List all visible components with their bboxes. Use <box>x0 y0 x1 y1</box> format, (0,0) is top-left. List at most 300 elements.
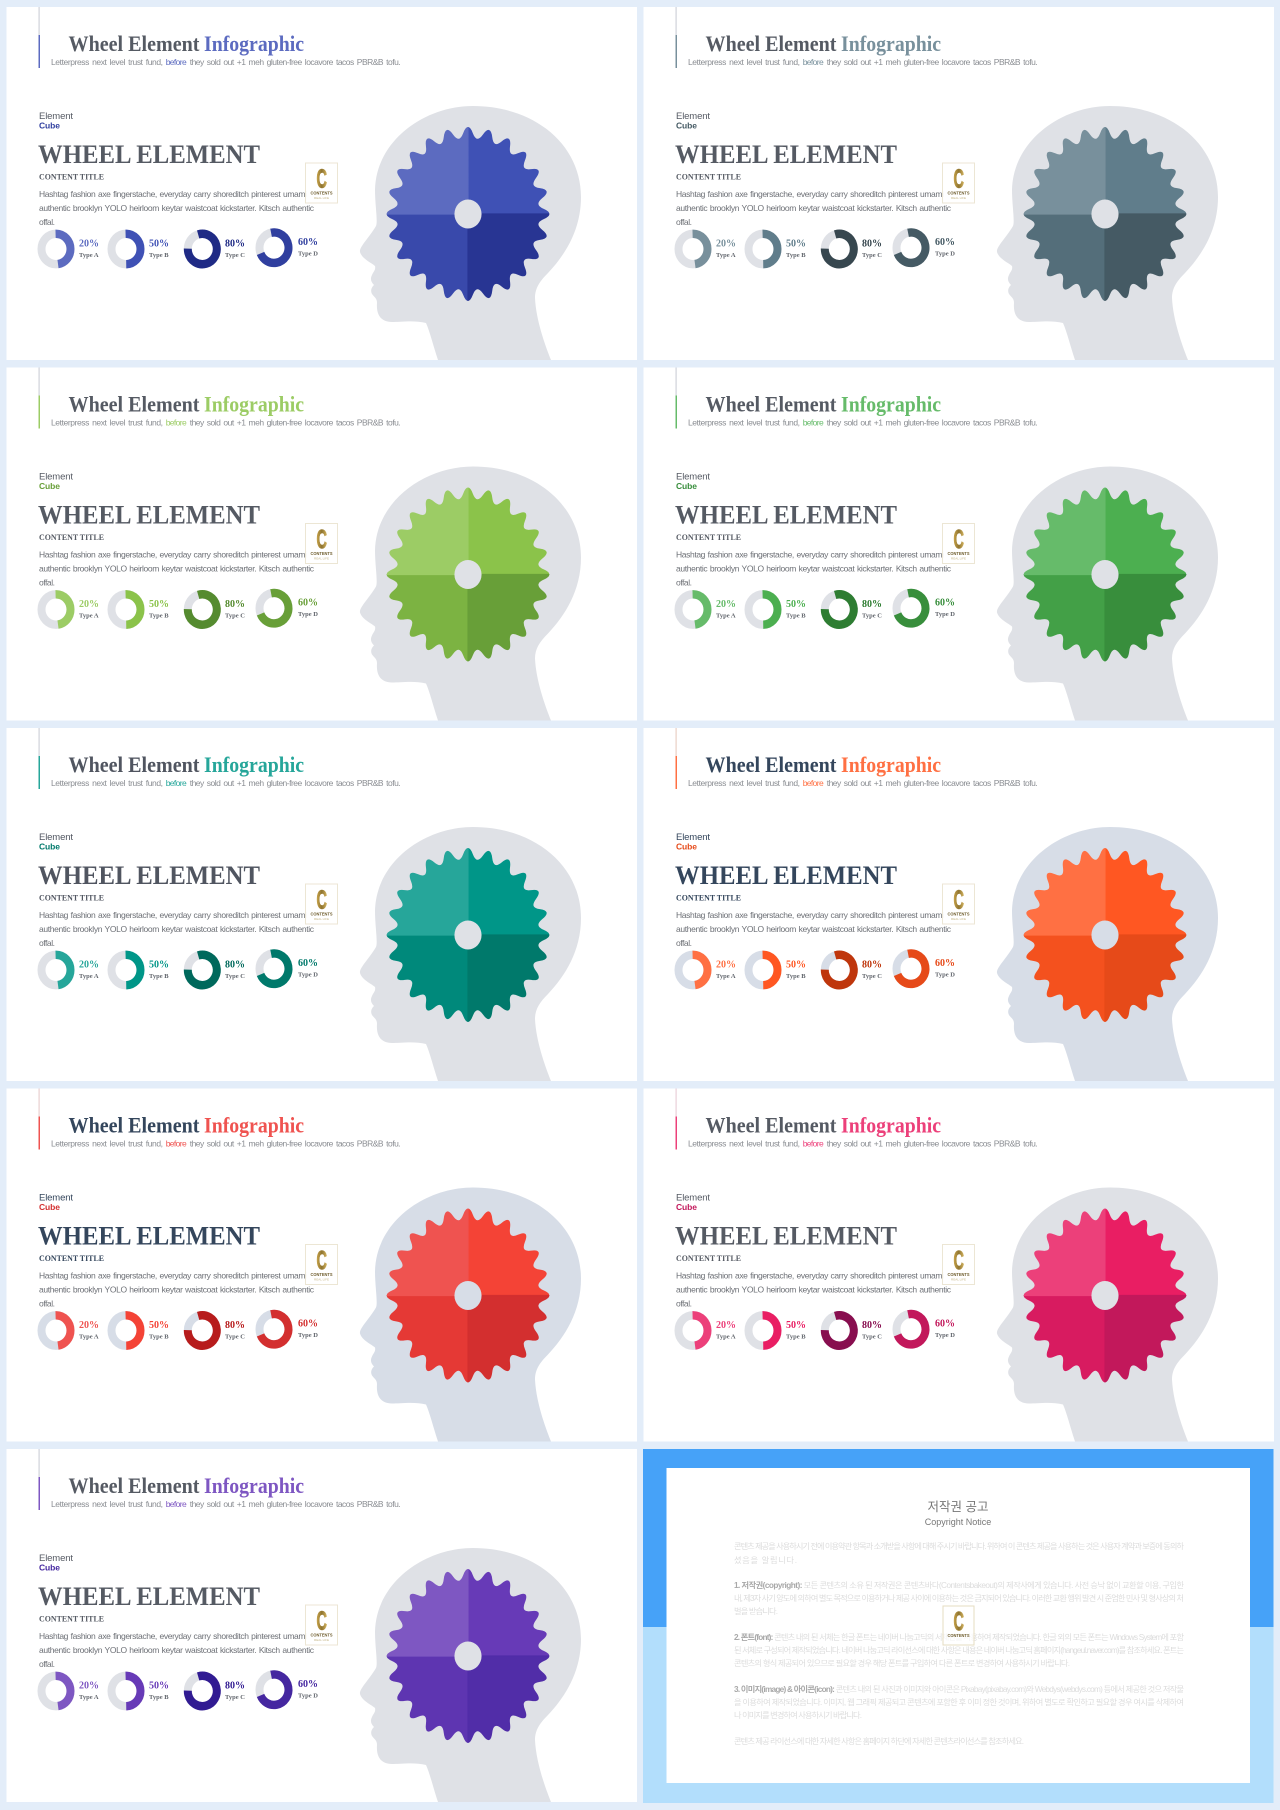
donut: Type A 20%: 20% <box>79 960 99 970</box>
body text: authentic brooklyn YOLO heirloom keytar waistcoat kickstarter. Kitsch authentic <box>39 924 315 934</box>
donut: Type A 20%: 20% <box>716 238 736 250</box>
subtitle: before <box>803 57 824 67</box>
logo: CONTENTS <box>948 1272 970 1277</box>
element label: Element <box>676 1192 710 1204</box>
subtitle <box>51 1499 401 1509</box>
icon: head silhouette <box>997 1188 1218 1442</box>
element label: Cube <box>39 842 60 852</box>
icon: gear wheel <box>1024 488 1186 661</box>
subtitle <box>51 1138 401 1148</box>
donut: Type D 60% <box>894 951 955 986</box>
logo <box>943 1606 974 1645</box>
donut: Type C 80%: Type C <box>862 252 882 259</box>
body text <box>39 189 315 227</box>
donut: Type C 80% <box>822 1312 882 1349</box>
donut: Type A 20% <box>678 1315 736 1346</box>
text block: copyright clause <box>734 1580 1184 1616</box>
donut: Type C 80% <box>185 1312 245 1349</box>
donut: Type C 80% <box>822 591 882 628</box>
donut: Type B 50%: Type B <box>786 1334 806 1340</box>
heading: Infographic <box>204 31 304 56</box>
donut: Type D 60% <box>257 230 318 265</box>
donut: Type D 60%: Type D <box>298 1332 318 1339</box>
donut: Type D 60%: Type D <box>935 250 955 258</box>
logo: C <box>954 164 964 194</box>
main title: WHEEL ELEMENT <box>38 1220 260 1250</box>
text block: font clause <box>734 1632 1184 1668</box>
body text: offal. <box>39 578 55 588</box>
donut: Type A 20%: Type A <box>79 973 99 980</box>
text block: font clause: 2. 폰트(font): 콘텐츠 내의 된 서체는 한글 폰트는 네이버 나눔고딕의 서체만을 사용하여 제작되었습니다. 한글 외의 모든 폰트는 Windows System에 포함 <box>734 1632 1184 1642</box>
main title: WHEEL ELEMENT <box>38 139 260 169</box>
content title: CONTENT TITLE <box>676 1253 741 1263</box>
icon: head silhouette <box>997 827 1218 1081</box>
logo <box>942 163 974 203</box>
body text: authentic brooklyn YOLO heirloom keytar waistcoat kickstarter. Kitsch authentic <box>676 1284 952 1294</box>
subtitle <box>51 418 401 428</box>
heading: Wheel Element <box>706 1112 837 1138</box>
donut: Type D 60% <box>257 1672 318 1707</box>
subtitle: Letterpress next level trust fund, <box>51 1499 163 1509</box>
element label: Cube <box>39 481 60 491</box>
text block: introduction <box>734 1541 1184 1565</box>
logo: CONTENTS <box>948 1633 970 1638</box>
heading <box>706 1112 941 1138</box>
donut: Type A 20%: 20% <box>79 599 99 610</box>
heading <box>68 31 304 56</box>
donut: Type D 60%: 60% <box>298 958 318 969</box>
content title: CONTENT TITLE <box>676 532 741 542</box>
donut: Type C 80%: Type C <box>862 973 882 980</box>
donut: Type A 20%: Type A <box>716 973 736 980</box>
subtitle: before <box>166 1138 187 1148</box>
logo: REAL LIFE <box>951 556 966 560</box>
donut: Type C 80% <box>822 951 882 989</box>
logo: REAL LIFE <box>951 917 966 921</box>
donut: Type D 60%: Type D <box>298 1692 318 1700</box>
text block: copyright clause: 내, 제3자 사기 양도에 의하여 별도 목적으로 이용하거나 제공 사이에 이용하는 것은 금지되어 있습니다. 이러한 교환 행위 발견 시 준엄한 민사 및 형사상의 처 <box>734 1593 1184 1603</box>
heading: Infographic <box>841 752 941 777</box>
donut: Type B 50%: 50% <box>149 960 169 970</box>
icon: gear wheel <box>387 1570 549 1742</box>
logo: CONTENTS <box>948 551 970 556</box>
body text: Hashtag fashion axe fingerstache, everyday carry shoreditch pinterest umami <box>676 910 944 920</box>
body text: Hashtag fashion axe fingerstache, everyday carry shoreditch pinterest umami <box>39 910 307 920</box>
element label: Element <box>39 472 73 482</box>
text block: image clause: 을 이용하여 제작되었습니다. 이미지, 웹 그래픽 제공되고 콘텐츠에 포함한 후 이미 정한 것이며, 위하여 별도로 확인하고 필요할 경우 여시를 삭제하여 <box>734 1697 1184 1707</box>
heading: Infographic <box>204 392 304 416</box>
donut: Type A 20% <box>42 955 99 985</box>
body text <box>39 1270 315 1308</box>
element label: Cube <box>39 1562 60 1572</box>
element label <box>39 1553 73 1572</box>
donut: Type B 50%: Type B <box>149 612 169 620</box>
heading: Wheel Element <box>68 1112 200 1138</box>
body text: authentic brooklyn YOLO heirloom keytar waistcoat kickstarter. Kitsch authentic <box>39 1284 315 1294</box>
logo <box>306 524 338 564</box>
donut: Type C 80%: 80% <box>862 599 882 610</box>
icon: head silhouette <box>360 106 581 360</box>
donut: Type A 20% <box>42 594 99 625</box>
donut: Type B 50%: Type B <box>786 973 806 980</box>
subtitle <box>51 57 401 67</box>
subtitle: they sold out +1 meh gluten-free locavore tacos PBR&B tofu. <box>827 1138 1038 1148</box>
donut: Type B 50%: Type B <box>149 1334 169 1340</box>
main title: WHEEL ELEMENT <box>38 500 260 530</box>
subtitle: before <box>166 1499 187 1509</box>
donut: Type D 60%: 60% <box>935 598 955 608</box>
element label: Element <box>39 1192 73 1204</box>
body text: authentic brooklyn YOLO heirloom keytar waistcoat kickstarter. Kitsch authentic <box>676 203 952 213</box>
text block: image clause <box>734 1684 1184 1720</box>
donut: Type C 80% <box>185 230 245 268</box>
body text: authentic brooklyn YOLO heirloom keytar waistcoat kickstarter. Kitsch authentic <box>39 564 315 574</box>
element label: Cube <box>39 1202 60 1212</box>
logo: REAL LIFE <box>314 917 329 921</box>
subtitle: they sold out +1 meh gluten-free locavore tacos PBR&B tofu. <box>827 57 1038 67</box>
donut: Type D 60%: Type D <box>935 611 955 618</box>
subtitle: they sold out +1 meh gluten-free locavore tacos PBR&B tofu. <box>190 57 401 67</box>
element label <box>39 111 73 130</box>
element label: Element <box>39 111 73 122</box>
content title: CONTENT TITLE <box>39 532 104 542</box>
donut: Type D 60%: 60% <box>298 598 318 608</box>
donut: Type B 50%: Type B <box>149 973 169 980</box>
donut: Type C 80% <box>185 591 245 628</box>
donut: Type B 50%: 50% <box>149 238 169 250</box>
panel: red wheel slide <box>6 1088 637 1442</box>
donut: Type B 50% <box>748 1315 806 1346</box>
panel: blue grey wheel slide <box>644 7 1274 360</box>
donut: Type B 50%: Type B <box>149 252 169 259</box>
body text <box>39 550 315 588</box>
donut: Type A 20% <box>678 955 736 985</box>
heading: copyright title: 저작권 공고 <box>928 1500 988 1514</box>
subtitle <box>688 418 1038 428</box>
donut: Type D 60%: Type D <box>298 611 318 618</box>
element label: Element <box>676 472 710 482</box>
element label <box>676 832 710 852</box>
heading <box>706 752 941 777</box>
element label: Cube <box>39 120 60 130</box>
element label <box>676 1192 710 1212</box>
donut: Type D 60% <box>894 1312 955 1347</box>
text block: introduction: 셨음을 알립니다. <box>734 1555 797 1565</box>
subtitle: Letterpress next level trust fund, <box>51 418 163 428</box>
icon: head silhouette <box>360 1188 581 1442</box>
donut: Type D 60% <box>894 230 955 265</box>
body text: Hashtag fashion axe fingerstache, everyday carry shoreditch pinterest umami <box>39 1631 307 1641</box>
content title: CONTENT TITLE <box>676 892 741 902</box>
body text: offal. <box>676 938 692 948</box>
donut: Type B 50%: Type B <box>786 612 806 620</box>
donut: Type A 20%: Type A <box>79 252 99 259</box>
logo: REAL LIFE <box>314 196 329 200</box>
donut: Type B 50% <box>112 1676 169 1706</box>
donut: Type D 60% <box>257 1312 318 1347</box>
donut: Type A 20% <box>678 234 736 264</box>
donut: Type C 80%: Type C <box>225 252 245 259</box>
subtitle: before <box>803 778 824 788</box>
heading: Infographic <box>841 31 941 56</box>
heading <box>706 31 941 56</box>
body text: offal. <box>39 1659 55 1669</box>
icon: gear wheel <box>1024 1209 1186 1382</box>
icon: gear wheel <box>387 849 549 1021</box>
donut: Type D 60%: 60% <box>298 237 318 248</box>
heading: Wheel Element <box>706 31 837 56</box>
body text: authentic brooklyn YOLO heirloom keytar waistcoat kickstarter. Kitsch authentic <box>676 564 952 574</box>
donut: Type C 80%: Type C <box>225 1694 245 1701</box>
donut: Type A 20%: 20% <box>79 238 99 250</box>
donut: Type A 20%: 20% <box>79 1680 99 1692</box>
logo <box>306 1605 338 1645</box>
donut: Type C 80%: Type C <box>862 1334 882 1340</box>
logo: REAL LIFE <box>951 1278 966 1282</box>
donut: Type B 50% <box>112 955 169 985</box>
donut: Type C 80% <box>185 1672 245 1710</box>
donut: Type D 60%: Type D <box>298 250 318 258</box>
donut: Type D 60%: Type D <box>935 1332 955 1339</box>
content title: CONTENT TITLE <box>39 1253 104 1263</box>
icon: head silhouette <box>360 466 581 720</box>
panel: copyright notice <box>643 1449 1274 1803</box>
element label <box>676 111 710 130</box>
donut: Type C 80%: 80% <box>225 238 245 250</box>
heading: Wheel Element <box>68 1473 200 1498</box>
donut: Type C 80%: 80% <box>862 238 882 250</box>
subtitle <box>688 57 1038 67</box>
donut: Type B 50% <box>112 1315 169 1346</box>
icon: gear wheel <box>1024 849 1186 1021</box>
element label: Cube <box>676 481 697 491</box>
body text: offal. <box>676 1298 692 1308</box>
donut: Type A 20%: Type A <box>79 612 99 620</box>
subtitle: before <box>166 418 187 428</box>
body text: offal. <box>39 1298 55 1308</box>
logo <box>942 884 974 924</box>
donut: Type D 60%: Type D <box>298 972 318 978</box>
donut: Type D 60%: 60% <box>935 1318 955 1330</box>
element label <box>39 832 73 852</box>
icon: gear wheel <box>1024 128 1186 300</box>
body text: authentic brooklyn YOLO heirloom keytar waistcoat kickstarter. Kitsch authentic <box>676 924 952 934</box>
subtitle: Letterpress next level trust fund, <box>51 57 163 67</box>
element label <box>676 472 710 491</box>
panel: teal wheel slide <box>6 728 637 1081</box>
donut: Type C 80%: 80% <box>862 1320 882 1331</box>
body text <box>676 189 952 227</box>
panel: indigo wheel slide <box>6 7 637 360</box>
element label <box>39 1192 73 1212</box>
subtitle: Letterpress next level trust fund, <box>688 57 800 67</box>
donut: Type D 60%: 60% <box>298 1679 318 1690</box>
subtitle: they sold out +1 meh gluten-free locavore tacos PBR&B tofu. <box>190 1499 401 1509</box>
panel: light green wheel slide <box>6 368 637 720</box>
main title: WHEEL ELEMENT <box>38 860 260 890</box>
heading <box>68 392 304 416</box>
content title: CONTENT TITLE <box>39 1614 104 1624</box>
heading: Wheel Element <box>706 392 837 416</box>
logo: C <box>316 1606 327 1636</box>
logo: CONTENTS <box>948 190 970 196</box>
donut: Type A 20%: Type A <box>716 1334 736 1340</box>
donut: Type B 50% <box>112 234 169 264</box>
heading <box>68 1112 304 1138</box>
logo <box>306 884 338 924</box>
subtitle: they sold out +1 meh gluten-free locavore tacos PBR&B tofu. <box>190 418 401 428</box>
logo <box>942 524 974 564</box>
donut: Type B 50%: Type B <box>149 1694 169 1701</box>
donut: Type C 80%: 80% <box>225 599 245 610</box>
main title: WHEEL ELEMENT <box>675 1220 897 1250</box>
icon: head silhouette <box>360 827 581 1081</box>
body text: authentic brooklyn YOLO heirloom keytar waistcoat kickstarter. Kitsch authentic <box>39 203 315 213</box>
body text <box>39 1631 315 1669</box>
body text: offal. <box>39 938 55 948</box>
panel: orange wheel slide <box>644 728 1274 1081</box>
text block: copyright clause: 벌을 받습니다. <box>734 1606 778 1616</box>
content title: CONTENT TITLE <box>39 892 104 902</box>
donut: Type B 50%: 50% <box>786 960 806 970</box>
subtitle: they sold out +1 meh gluten-free locavore tacos PBR&B tofu. <box>827 778 1038 788</box>
icon: head silhouette <box>360 1548 581 1802</box>
main title: WHEEL ELEMENT <box>675 500 897 530</box>
element label: Cube <box>676 120 697 130</box>
heading <box>706 392 941 416</box>
main title: WHEEL ELEMENT <box>38 1581 260 1611</box>
text block: image clause: 나 이미지를 변경하여 사용하시기 바랍니다. <box>734 1710 862 1720</box>
donut: Type D 60% <box>257 951 318 986</box>
element label: Element <box>39 1553 73 1564</box>
body text: Hashtag fashion axe fingerstache, everyday carry shoreditch pinterest umami <box>39 550 307 560</box>
heading: copyright title: Copyright Notice <box>925 1517 991 1527</box>
donut: Type A 20%: Type A <box>716 612 736 620</box>
body text <box>39 910 315 948</box>
heading: copyright title <box>925 1500 991 1527</box>
subtitle: before <box>803 418 824 428</box>
donut: Type A 20%: 20% <box>716 960 736 970</box>
donut: Type A 20%: 20% <box>79 1320 99 1331</box>
donut: Type C 80%: 80% <box>225 960 245 970</box>
donut: Type C 80%: 80% <box>862 960 882 970</box>
donut: Type A 20%: 20% <box>716 599 736 610</box>
subtitle: Letterpress next level trust fund, <box>688 1138 800 1148</box>
subtitle: they sold out +1 meh gluten-free locavore tacos PBR&B tofu. <box>190 1138 401 1148</box>
body text: Hashtag fashion axe fingerstache, everyday carry shoreditch pinterest umami <box>39 189 307 199</box>
body text: authentic brooklyn YOLO heirloom keytar waistcoat kickstarter. Kitsch authentic <box>39 1645 315 1655</box>
donut: Type C 80%: Type C <box>225 973 245 980</box>
donut: Type C 80%: Type C <box>862 612 882 620</box>
heading: Wheel Element <box>68 31 200 56</box>
logo: CONTENTS <box>310 551 332 556</box>
logo: C <box>316 164 327 194</box>
subtitle: Letterpress next level trust fund, <box>688 418 800 428</box>
heading: Infographic <box>204 1473 304 1498</box>
icon: gear wheel <box>387 1209 549 1382</box>
donut: Type A 20% <box>678 594 736 625</box>
donut: Type B 50%: 50% <box>149 1320 169 1331</box>
donut: Type B 50%: Type B <box>786 252 806 259</box>
donut: Type B 50% <box>748 234 806 264</box>
subtitle: they sold out +1 meh gluten-free locavore tacos PBR&B tofu. <box>827 418 1038 428</box>
panel: purple wheel slide <box>6 1449 637 1802</box>
content title: CONTENT TITLE <box>39 172 104 182</box>
donut: Type A 20% <box>42 1676 99 1706</box>
text block: font clause: 된 서체로 구성되어 제작되었습니다. 네이버 나눔고딕 라이선스에 대한 사항은 내용은 네이버 나눔고딕 홈페이지(hangeul.naver.com)를 참조하세요. 폰트는 <box>734 1645 1184 1655</box>
body text: offal. <box>676 578 692 588</box>
logo: REAL LIFE <box>314 556 329 560</box>
body text: Hashtag fashion axe fingerstache, everyday carry shoreditch pinterest umami <box>676 1270 944 1280</box>
logo: CONTENTS <box>310 1272 332 1277</box>
donut: Type B 50%: 50% <box>786 238 806 250</box>
donut: Type B 50% <box>112 594 169 625</box>
subtitle <box>688 1138 1038 1148</box>
donut: Type A 20% <box>42 1315 99 1346</box>
donut: Type D 60% <box>257 591 318 626</box>
donut: Type C 80%: 80% <box>225 1680 245 1692</box>
icon: gear wheel <box>387 488 549 661</box>
main title: WHEEL ELEMENT <box>675 139 897 169</box>
heading: Infographic <box>841 392 941 416</box>
content title: CONTENT TITLE <box>676 172 741 182</box>
logo: REAL LIFE <box>314 1278 329 1282</box>
donut: Type C 80% <box>185 951 245 989</box>
donut: Type B 50% <box>748 594 806 625</box>
icon: head silhouette <box>997 466 1218 720</box>
donut: Type D 60% <box>894 591 955 626</box>
body text: Hashtag fashion axe fingerstache, everyday carry shoreditch pinterest umami <box>676 189 944 199</box>
logo: CONTENTS <box>310 912 332 916</box>
donut: Type C 80%: Type C <box>225 1334 245 1340</box>
subtitle: before <box>166 778 187 788</box>
subtitle: Letterpress next level trust fund, <box>688 778 800 788</box>
heading <box>68 752 304 777</box>
body text: offal. <box>676 217 692 227</box>
logo: C <box>954 1606 964 1636</box>
donut: Type B 50%: 50% <box>149 599 169 610</box>
panel: pink wheel slide <box>644 1088 1274 1442</box>
donut: Type C 80%: 80% <box>225 1320 245 1331</box>
body text <box>676 910 952 948</box>
heading: Infographic <box>204 1112 304 1138</box>
body text <box>676 550 952 588</box>
logo: C <box>316 1245 327 1275</box>
logo: CONTENTS <box>310 1632 332 1638</box>
logo: C <box>954 524 964 554</box>
element label: Element <box>676 832 710 843</box>
logo: C <box>316 524 327 554</box>
heading: Wheel Element <box>706 752 837 777</box>
logo: REAL LIFE <box>951 196 966 200</box>
subtitle: they sold out +1 meh gluten-free locavore tacos PBR&B tofu. <box>190 778 401 788</box>
donut: Type A 20%: 20% <box>716 1320 736 1331</box>
element label: Element <box>39 832 73 843</box>
main title: WHEEL ELEMENT <box>675 860 897 890</box>
panel: green wheel slide <box>644 368 1274 720</box>
subtitle: Letterpress next level trust fund, <box>51 1138 163 1148</box>
logo: C <box>954 884 964 914</box>
donut: Type A 20%: Type A <box>79 1694 99 1701</box>
subtitle: Letterpress next level trust fund, <box>51 778 163 788</box>
donut: Type B 50% <box>748 955 806 985</box>
icon: gear wheel <box>387 128 549 300</box>
element label: Cube <box>676 1202 697 1212</box>
heading <box>68 1473 304 1498</box>
logo <box>942 1244 974 1284</box>
heading: Wheel Element <box>68 392 200 416</box>
text block: font clause: 콘텐츠의 형식 제공되어 있으므로 필요할 경우 해당 폰트를 구입하여 다른 폰트로 변경하여 사용하시기 바랍니다. <box>734 1658 1070 1668</box>
